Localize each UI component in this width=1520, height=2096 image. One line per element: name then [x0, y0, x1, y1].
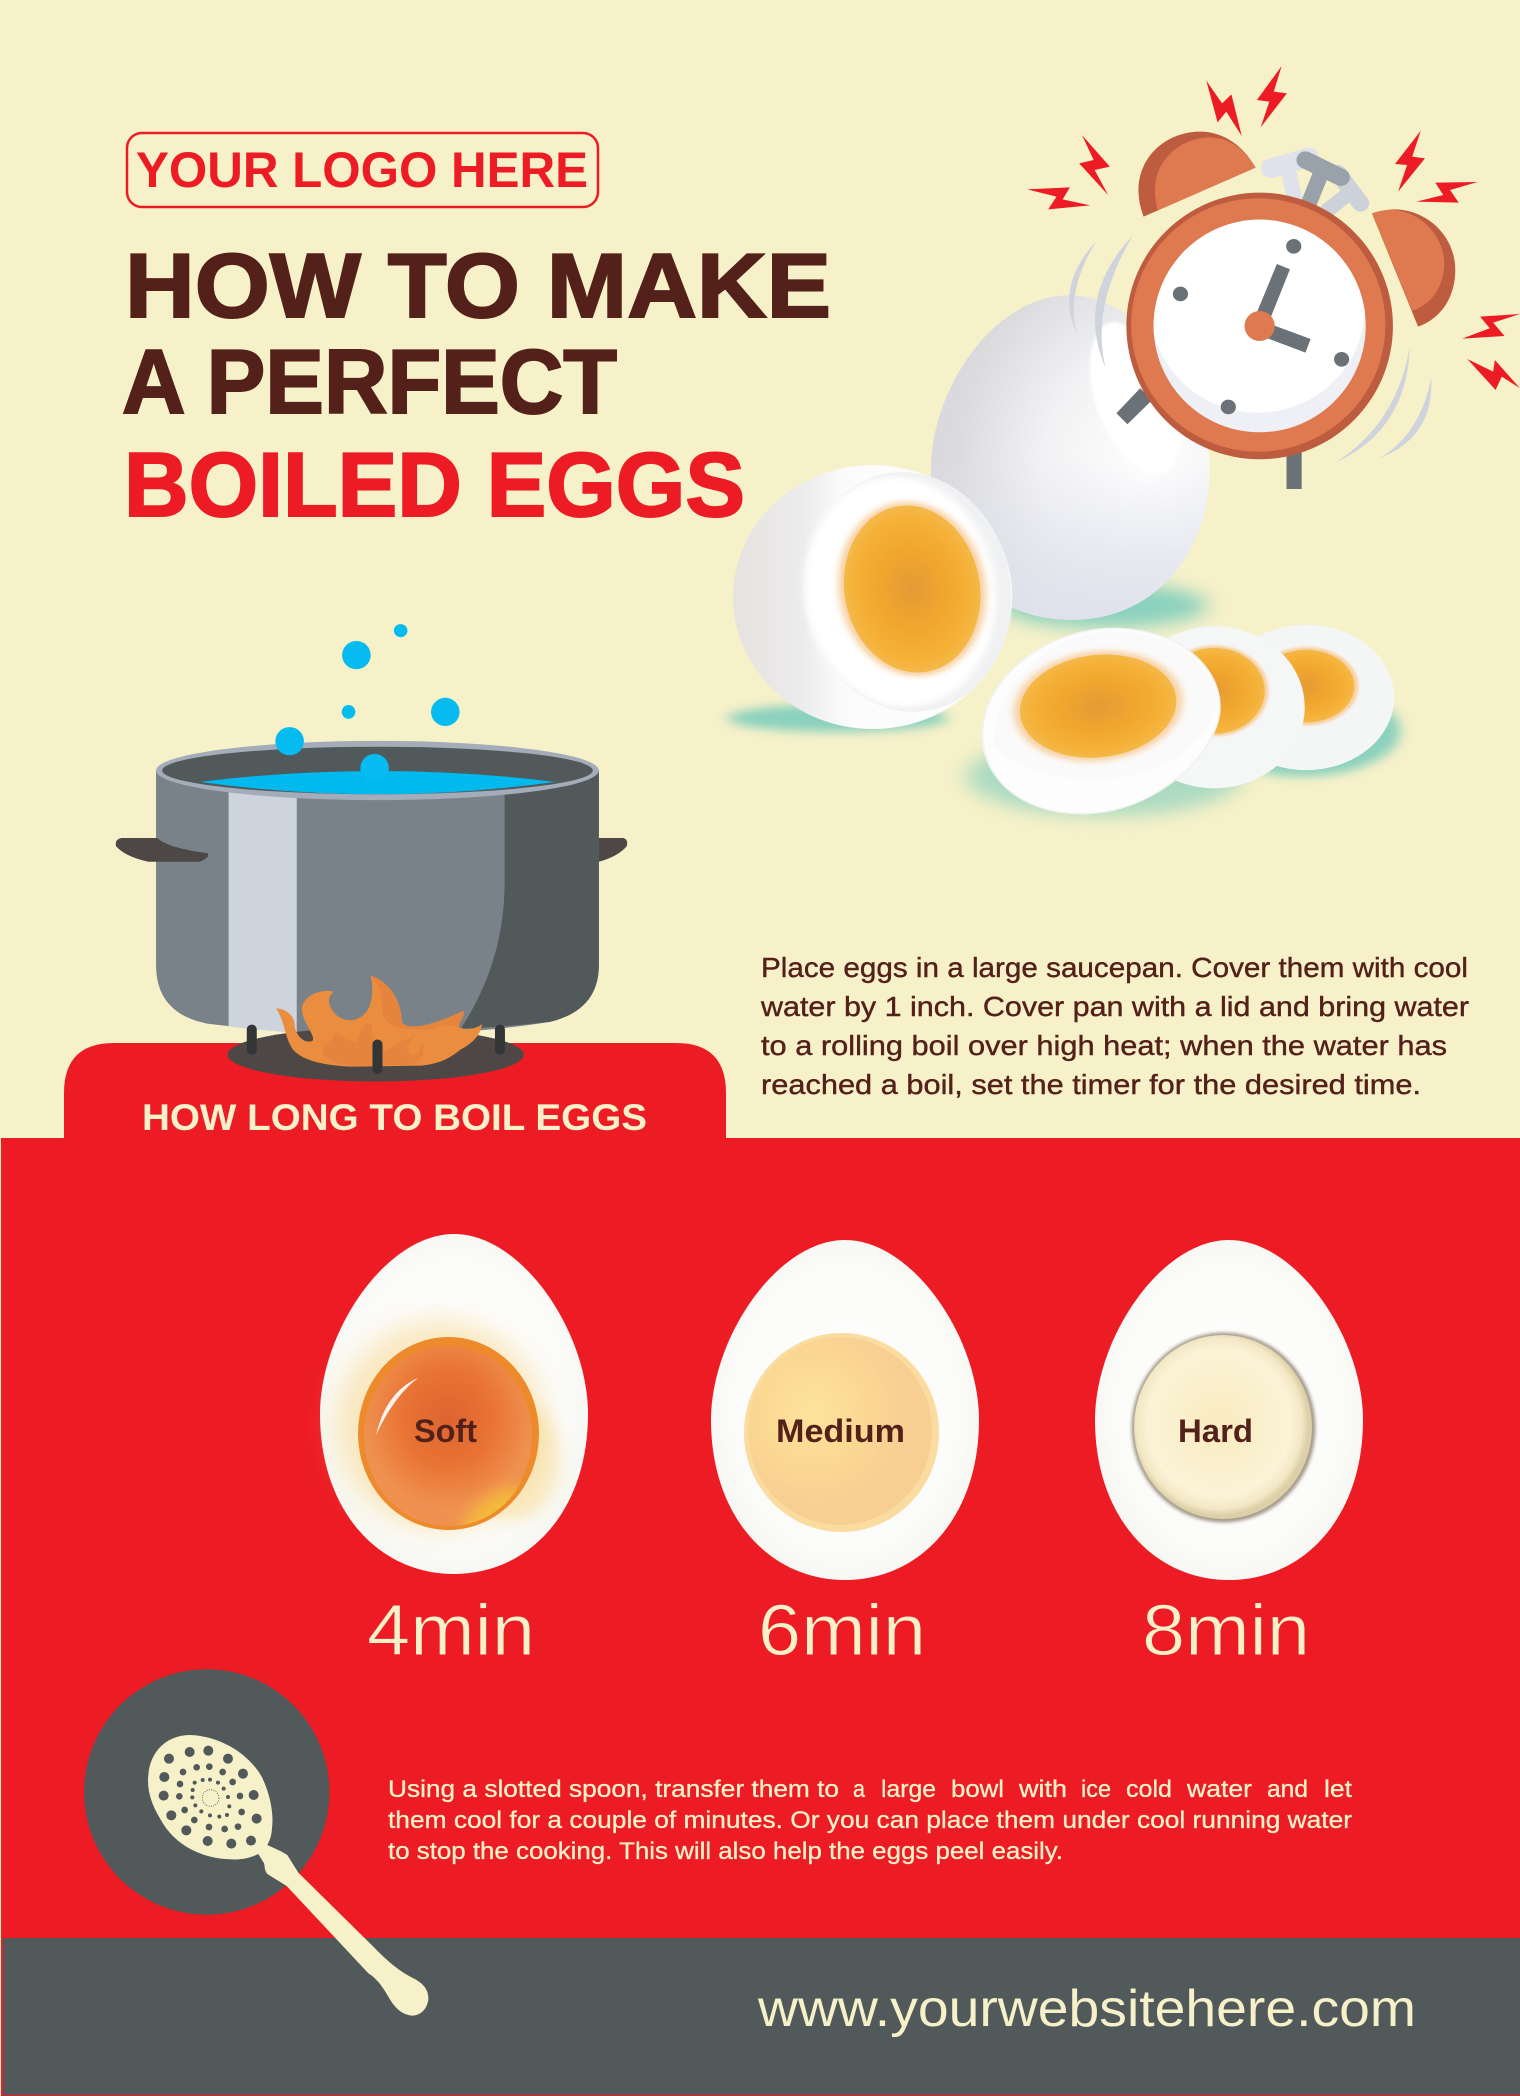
instructions: cool: large — [881, 1776, 936, 1803]
instructions: cool: and — [1267, 1776, 1308, 1803]
burner posts back — [247, 1025, 505, 1055]
clock hands — [1257, 264, 1311, 353]
website url: www.yourwebsitehere.com — [757, 1980, 1416, 2038]
whole egg — [931, 295, 1210, 620]
motion lines — [1069, 235, 1431, 463]
pot rim and water — [156, 741, 599, 800]
instructions: cool: water — [1186, 1776, 1252, 1803]
instructions: cool: bowl — [951, 1776, 1004, 1803]
illustration: boiling pot on burner — [116, 624, 627, 1081]
instructions: cool: a — [853, 1776, 866, 1803]
shadows — [728, 583, 1400, 816]
red panel with tab — [1, 1043, 1520, 2096]
flame — [276, 975, 482, 1067]
front slice — [982, 628, 1220, 814]
tab heading: HOW LONG TO BOIL EGGS — [142, 1097, 647, 1138]
hammer — [1271, 157, 1361, 210]
instructions: boil: Place eggs in a large saucepan. Cover them with cool — [761, 952, 1468, 983]
instructions: boil: water by 1 inch. Cover pan with a lid and bring water — [760, 991, 1469, 1022]
instructions: cool: Using a slotted spoon, transfer them to — [388, 1776, 839, 1803]
bubbles — [275, 624, 460, 782]
egg: medium — [711, 1240, 979, 1580]
pot handles — [116, 838, 627, 862]
yolk highlight — [376, 1378, 418, 1435]
halved egg — [733, 465, 1022, 729]
instructions: cool — [388, 1776, 1352, 1865]
clock feet — [1116, 388, 1302, 489]
illustration: ringing alarm clock — [1027, 66, 1520, 489]
burner post front — [372, 1039, 382, 1074]
instructions: cool: cold — [1126, 1776, 1172, 1803]
instructions: cool: them cool for a couple of minutes. Or you can place them under cool running water — [388, 1807, 1352, 1834]
time: 6min: 6min — [758, 1591, 926, 1671]
logo box: YOUR LOGO HERE — [136, 142, 588, 198]
pot body — [156, 770, 599, 1035]
instructions: boil: to a rolling boil over high heat; when the water has — [761, 1030, 1447, 1061]
clock body — [1126, 193, 1393, 459]
title — [122, 236, 831, 536]
egg: hard — [1095, 1240, 1363, 1580]
title: HOW TO MAKE — [125, 236, 831, 337]
instructions: boil — [760, 952, 1469, 1100]
instructions: cool: with — [1018, 1776, 1067, 1803]
egg: soft: Soft — [414, 1413, 477, 1449]
hour markers — [1173, 239, 1349, 414]
spoon circle — [84, 1669, 329, 1915]
title: A PERFECT — [122, 332, 617, 433]
burner — [227, 1028, 524, 1081]
icon: slotted spoon — [148, 1735, 428, 2016]
title: BOILED EGGS — [124, 435, 745, 536]
footer bar — [3, 1938, 1520, 2095]
left bell — [1138, 132, 1256, 217]
middle slice — [1124, 626, 1305, 788]
illustration: boiled eggs — [728, 295, 1400, 816]
egg: soft — [320, 1234, 588, 1574]
instructions: cool: let — [1324, 1776, 1352, 1803]
back slice — [1218, 625, 1394, 770]
egg: hard: Hard — [1178, 1413, 1253, 1449]
egg: medium: Medium — [776, 1413, 905, 1449]
instructions: boil: reached a boil, set the timer for the desired time. — [761, 1069, 1421, 1100]
instructions: cool: ice — [1081, 1776, 1111, 1803]
instructions: cool: to stop the cooking. This will also help the eggs peel easily. — [388, 1838, 1063, 1865]
time: 8min: 8min — [1142, 1591, 1310, 1671]
time: 4min: 4min — [367, 1591, 535, 1671]
alarm bolts — [1027, 66, 1520, 390]
right bell — [1372, 209, 1455, 327]
